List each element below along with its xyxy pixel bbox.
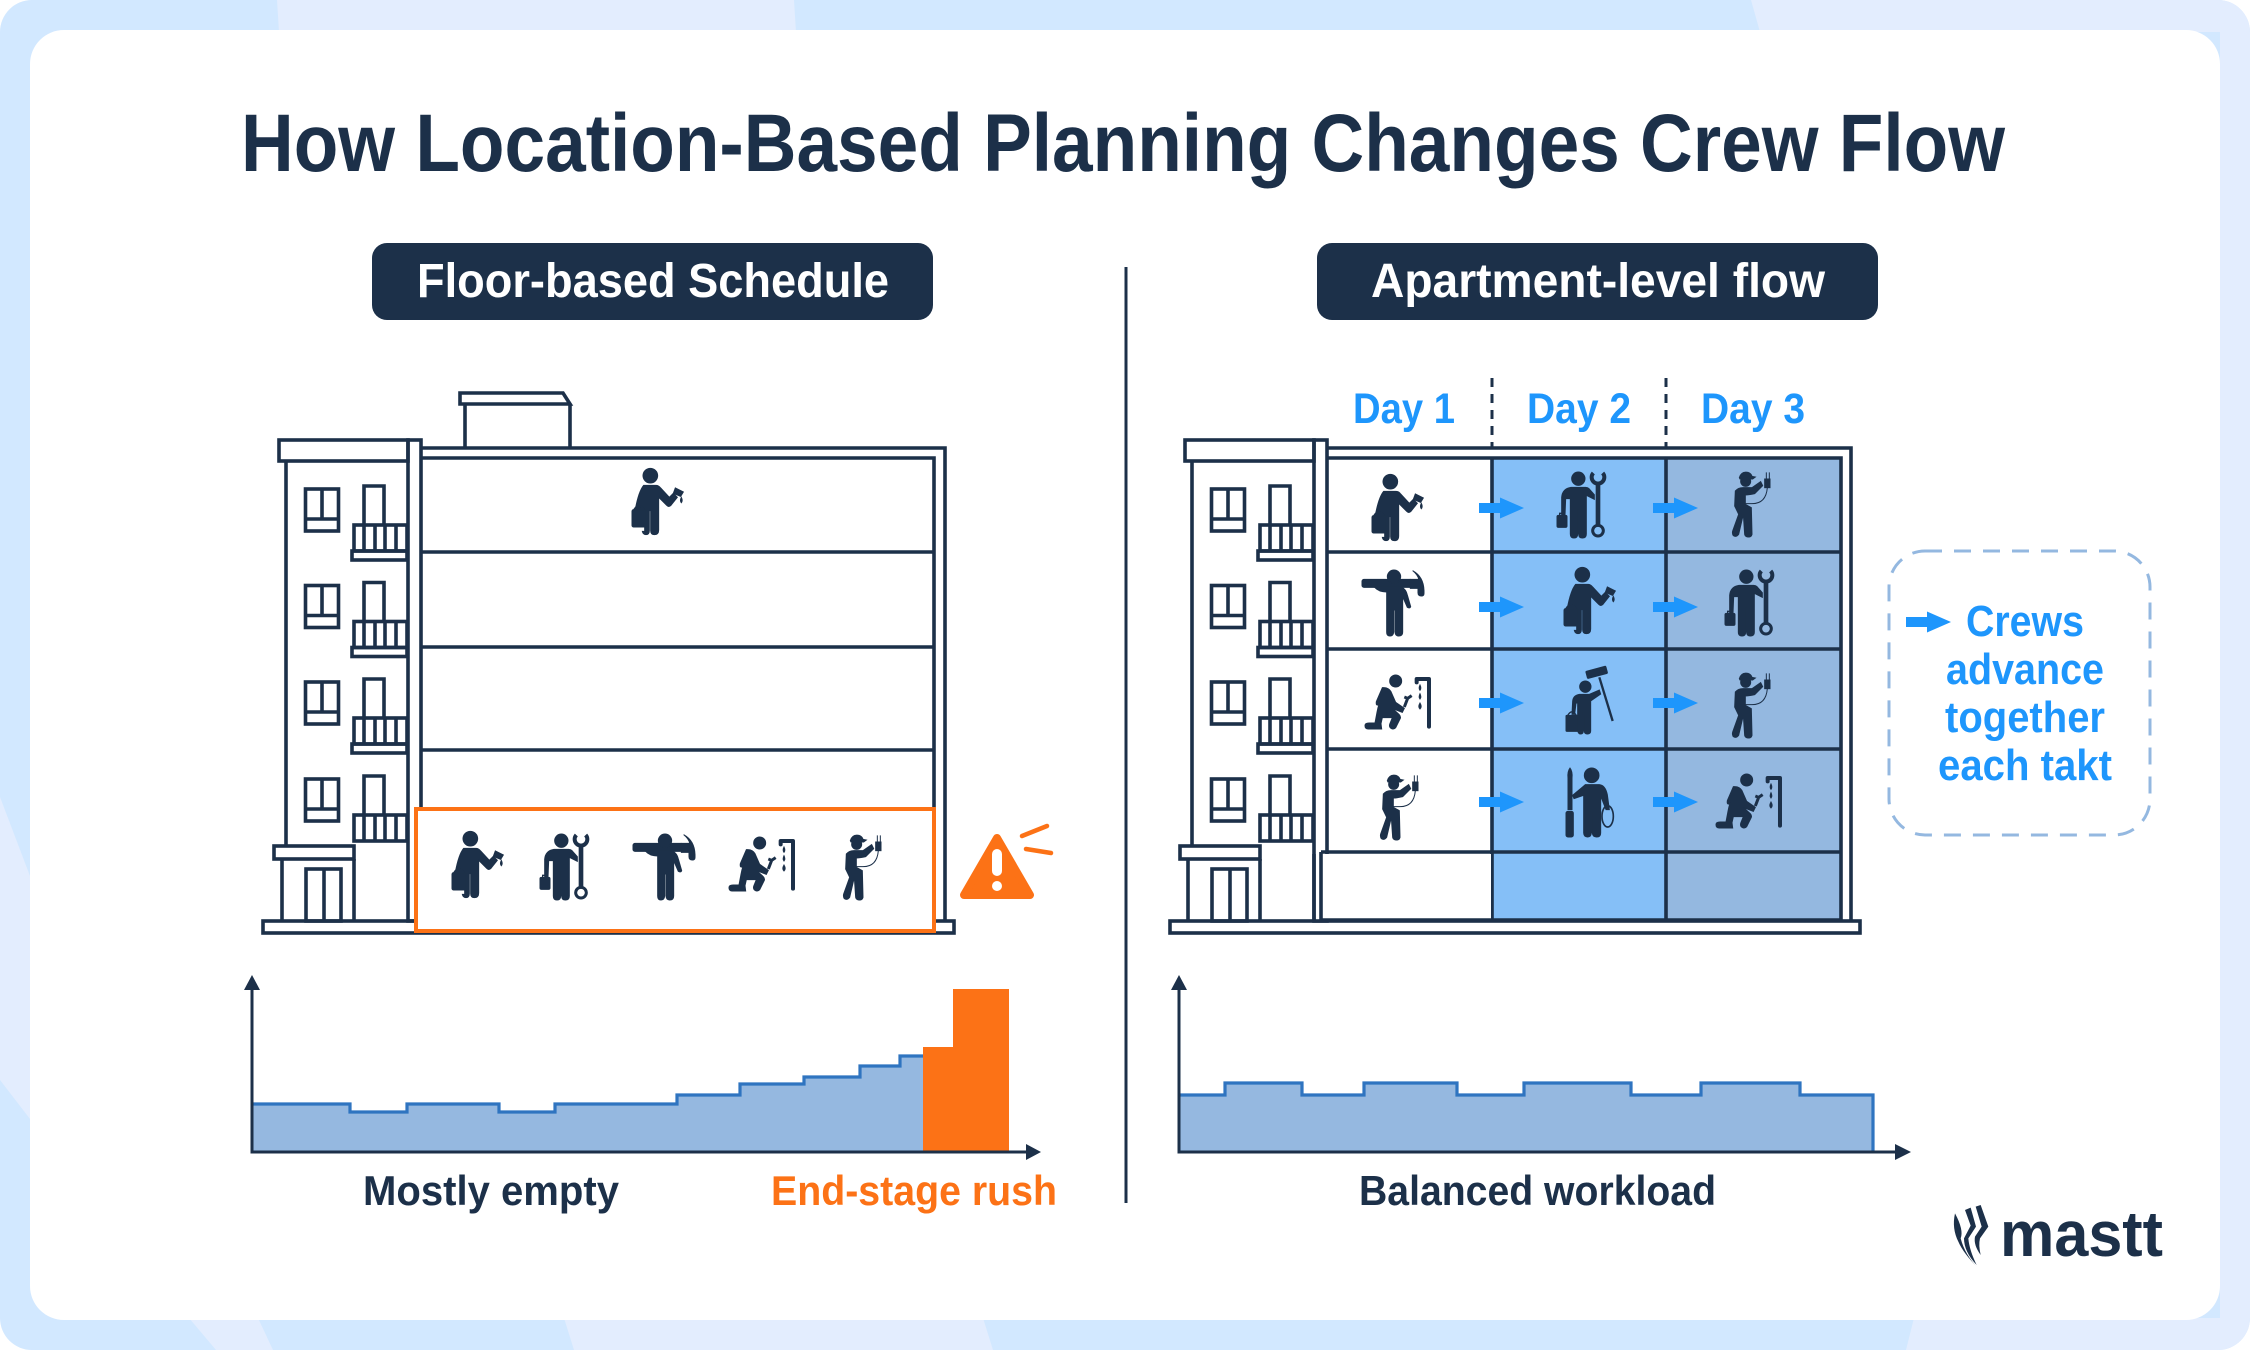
divider: [1124, 267, 1128, 1203]
icon: plumber: [729, 837, 793, 891]
row 4 crews: [1380, 768, 1780, 840]
day separators: [1492, 378, 1666, 448]
label: mostly empty: Mostly empty: [363, 1167, 620, 1214]
roof box: [460, 393, 570, 448]
panel: apartment-level building: [1170, 378, 1860, 933]
icon: warning: [964, 826, 1051, 895]
label: day 1: Day 1: [1353, 385, 1455, 433]
callout text: advance: [1946, 645, 2104, 694]
row 3 crews: [1365, 666, 1770, 738]
logo word: mastt: [2000, 1198, 2163, 1270]
row 1 crews: [1372, 472, 1770, 541]
panel: floor-based building: [263, 393, 954, 933]
logo mark: [1954, 1205, 1988, 1268]
day columns: [1492, 458, 1666, 920]
ground-floor cell: [1314, 852, 1491, 921]
icon: painter: [452, 831, 503, 898]
icon: mechanic: [540, 834, 587, 900]
label: day 3: Day 3: [1701, 385, 1805, 433]
chart: floor-based workload: [244, 975, 1057, 1214]
heading: apartment-level flow: [1317, 243, 1878, 320]
highlighted bottom floor: [416, 809, 934, 931]
callout text: Crews: [1966, 597, 2084, 646]
icon: carpenter: [633, 834, 695, 900]
heading: floor-based schedule: Floor-based Schedule: [417, 255, 889, 308]
label: day 2: Day 2: [1527, 385, 1631, 433]
callout text: [1938, 597, 2112, 790]
label: balanced workload: Balanced workload: [1359, 1167, 1716, 1214]
heading: floor-based schedule: [372, 243, 933, 320]
heading: apartment-level flow: Apartment-level flow: [1371, 255, 1826, 308]
stair tower: [1180, 440, 1327, 921]
title: How Location-Based Planning Changes Crew Flow: [241, 98, 2005, 189]
callout text: together: [1945, 693, 2105, 742]
icon: painter top floor: [632, 468, 683, 535]
row 2 crews: [1362, 567, 1772, 636]
logo: mastt: [1954, 1198, 2163, 1270]
icon: electrician: [843, 835, 881, 900]
callout: crews advance together: [1889, 551, 2150, 835]
chart: balanced workload: [1171, 975, 1911, 1214]
icon: arrow: [1906, 612, 1951, 632]
callout text: each takt: [1938, 741, 2112, 790]
label: end-stage rush: End-stage rush: [771, 1167, 1057, 1214]
stair tower: [274, 440, 421, 921]
